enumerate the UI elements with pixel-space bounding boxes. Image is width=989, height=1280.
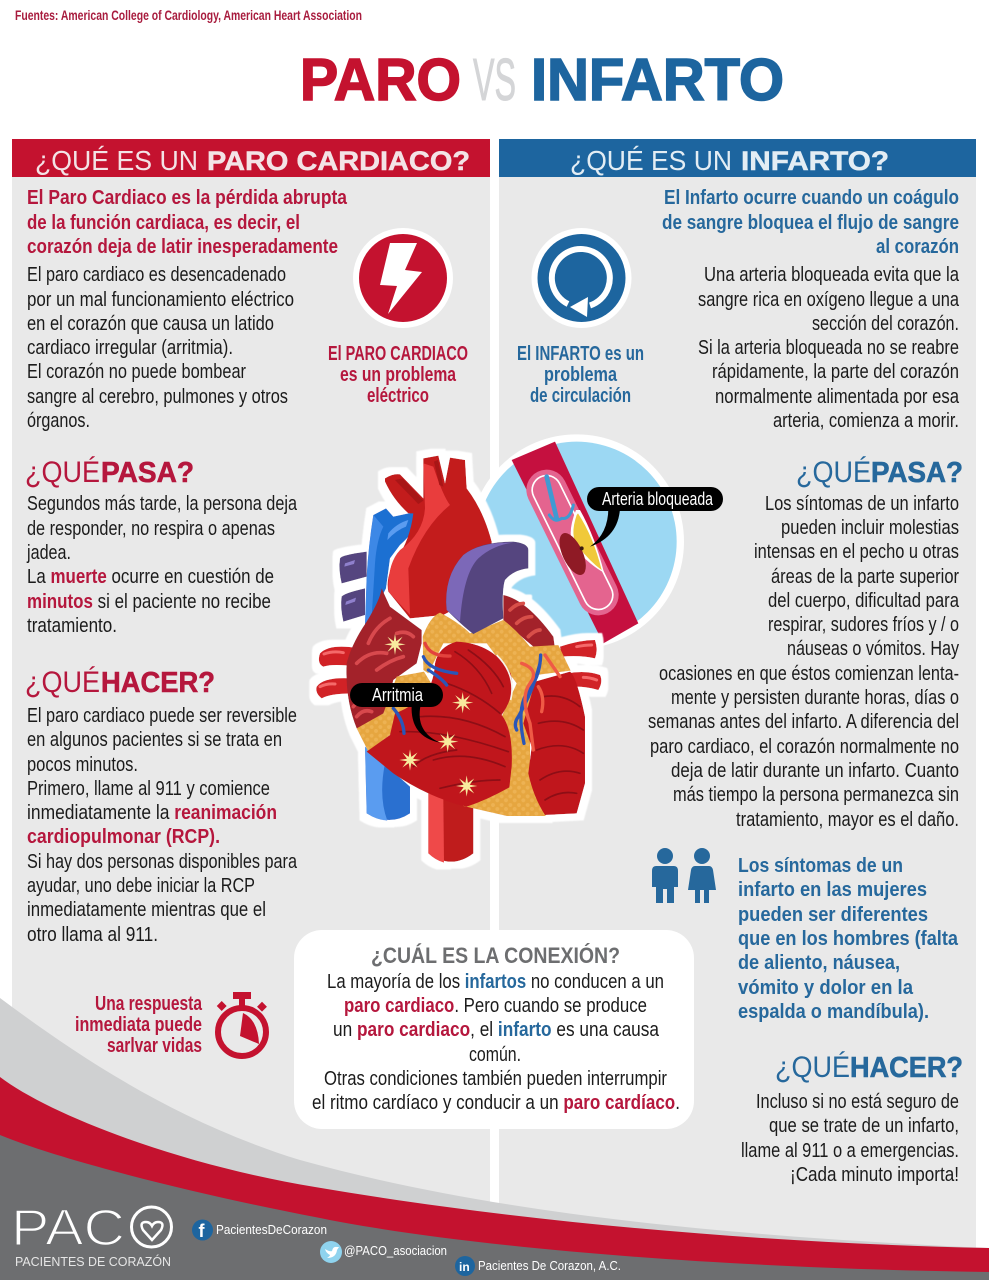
text: sintomas en mujeres: Los síntomas de un — [738, 855, 903, 877]
heading: que pasa (infarto) — [796, 456, 963, 489]
callout: arritmia — [350, 683, 443, 707]
callout: arteria bloqueada: Arteria bloqueada — [602, 489, 714, 509]
intro: paro cardiaco definition: El Paro Cardiaco es la pérdida abrupta — [27, 187, 348, 209]
text: paro cardiaco explanation — [27, 264, 294, 432]
logo: PACO: PAC — [11, 1199, 125, 1256]
text: que hacer (paro): El paro cardiaco puede ser reversible — [27, 705, 297, 727]
text: que pasa (paro): minutos si el paciente no recibe — [27, 591, 271, 613]
header: infarto — [499, 139, 976, 177]
callout panel: cual es la conexion: el ritmo cardíaco y conducir a un paro cardíaco. — [312, 1092, 680, 1114]
social: facebook: PacientesDeCorazon — [216, 1222, 327, 1237]
callout panel: cual es la conexion: paro cardiaco. Pero cuando se produce — [344, 995, 647, 1017]
side vessels — [316, 640, 601, 698]
social: twitter — [320, 1241, 447, 1263]
heading: que hacer (paro): ¿QUÉ — [25, 666, 100, 699]
label: problema de circulacion: de circulación — [530, 385, 631, 407]
text: sintomas en mujeres: que en los hombres (falta — [738, 928, 959, 950]
text: infarto explanation — [698, 264, 960, 432]
artery inset circle — [469, 434, 684, 649]
text: sintomas en mujeres: infarto en las mujeres — [738, 879, 927, 901]
text: sintomas en mujeres: espalda o mandíbula). — [738, 1001, 929, 1023]
text: que hacer (infarto) heading — [775, 1051, 963, 1084]
text: que hacer (paro): inmediatamente mientras que el — [27, 899, 266, 921]
source line: Fuentes: American College of Cardiology, American Heart Association — [15, 7, 362, 23]
callout panel: cual es la conexion — [294, 930, 694, 1129]
label: problema de circulacion — [517, 343, 644, 407]
text: sintomas en mujeres — [738, 855, 959, 1023]
logo: PACO — [11, 1199, 172, 1269]
callout panel: cual es la conexion: un paro cardiaco, el infarto es una causa — [333, 1019, 660, 1041]
coronary vessels — [393, 643, 560, 750]
callout: arteria bloqueada — [587, 487, 723, 511]
text: que hacer (paro): ayudar, uno debe iniciar la RCP — [27, 875, 255, 897]
text: sintomas en mujeres: pueden ser diferentes — [738, 904, 928, 926]
label: problema de circulacion: problema — [544, 364, 618, 386]
heading: que pasa (paro): ¿QUÉ — [25, 456, 100, 489]
text: paro cardiaco explanation: El paro cardiaco es desencadenado — [27, 264, 286, 286]
text: paro cardiaco explanation: cardiaco irregular (arritmia). — [27, 337, 233, 359]
text: paro cardiaco explanation: órganos. — [27, 410, 90, 432]
fat tissue — [357, 613, 571, 816]
text: que pasa (paro) — [26, 493, 298, 637]
text: que hacer (infarto) heading: ¿QUÉ — [775, 1051, 850, 1084]
text: que hacer (infarto) heading: HACER? — [850, 1052, 963, 1084]
label: problema electrico — [328, 343, 468, 407]
intro: paro cardiaco definition — [27, 187, 348, 258]
intro: paro cardiaco definition: corazón deja de latir inesperadamente — [27, 236, 338, 258]
callout: arritmia: Arritmia — [372, 685, 424, 705]
label: problema electrico: El PARO CARDIACO — [328, 343, 468, 365]
text: paro cardiaco explanation: El corazón no puede bombear — [27, 361, 246, 383]
intro: infarto definition — [662, 187, 959, 258]
text: paro cardiaco explanation: por un mal funcionamiento eléctrico — [27, 289, 294, 311]
intro: infarto definition: al corazón — [876, 236, 959, 258]
heart — [316, 456, 601, 863]
title: PARO — [300, 47, 461, 113]
text: respuesta inmediata: sarlvar vidas — [107, 1035, 202, 1057]
label: problema electrico: eléctrico — [367, 385, 429, 407]
header: paro cardiaco: ¿QUÉ ES UN — [35, 145, 198, 176]
title: INFARTO — [531, 47, 784, 113]
text: respuesta inmediata — [75, 993, 203, 1057]
heading: que pasa (paro): PASA? — [101, 457, 194, 489]
social: linkedin: in — [459, 1260, 470, 1274]
text: infarto explanation: sección del corazón. — [812, 313, 959, 335]
social: linkedin: Pacientes De Corazon, A.C. — [478, 1258, 621, 1273]
text: que hacer (paro): Primero, llame al 911 y comience — [27, 778, 270, 800]
icon: man and woman — [652, 848, 716, 903]
text: que hacer (paro): en algunos pacientes si se trata en — [27, 729, 282, 751]
text: que hacer (paro): cardiopulmonar (RCP). — [27, 826, 220, 848]
social: facebook: f — [198, 1221, 206, 1241]
text: que hacer (paro) — [27, 705, 298, 946]
heading: que hacer (paro) — [25, 666, 215, 699]
icon: stopwatch — [217, 992, 267, 1056]
right ventricle — [523, 672, 585, 815]
text: paro cardiaco explanation: sangre al cerebro, pulmones y otros — [27, 386, 288, 408]
callout tails — [412, 508, 620, 743]
purple vessels left — [339, 552, 367, 622]
callout panel: cual es la conexion: común. — [469, 1044, 521, 1066]
left ventricle — [367, 642, 512, 807]
heart and artery illustration — [316, 434, 684, 863]
text: que hacer (infarto): ¡Cada minuto importa! — [790, 1164, 959, 1186]
heading: que pasa (paro) — [25, 456, 194, 489]
text: que pasa (paro): jadea. — [26, 542, 71, 564]
header: paro cardiaco: PARO CARDIACO? — [207, 146, 470, 176]
intro: paro cardiaco definition: de la función cardiaca, es decir, el — [27, 212, 300, 234]
label: problema electrico: es un problema — [340, 364, 457, 386]
text: que pasa (paro): La muerte ocurre en cuestión de — [27, 566, 274, 588]
text: respuesta inmediata: inmediata puede — [75, 1014, 202, 1036]
aorta — [385, 456, 492, 618]
text: sintomas en mujeres: vómito y dolor en la — [738, 977, 914, 999]
heading: que pasa (infarto): PASA? — [871, 457, 963, 489]
callout panel: cual es la conexion: ¿CUÁL ES LA CONEXIÓN? — [371, 943, 620, 968]
text: que pasa (paro): de responder, no respira o apenas — [27, 518, 275, 540]
heading: que pasa (infarto): ¿QUÉ — [796, 456, 871, 489]
icon: lightning bolt — [353, 228, 453, 328]
social: linkedin — [455, 1256, 621, 1276]
text: que hacer (paro): inmediatamente la reanimación — [27, 802, 277, 824]
title: VS — [473, 47, 516, 113]
text: que hacer (paro): otro llama al 911. — [27, 924, 158, 946]
callout panel: cual es la conexion: Otras condiciones también pueden interrumpir — [324, 1068, 667, 1090]
atria — [346, 588, 555, 728]
text: que hacer (infarto) — [741, 1091, 959, 1186]
header: paro cardiaco — [12, 139, 490, 177]
text: paro cardiaco explanation: en el corazón que causa un latido — [27, 313, 274, 335]
text: que hacer (paro): Si hay dos personas disponibles para — [27, 851, 298, 873]
pulmonary artery — [446, 542, 528, 634]
text: que hacer (paro): pocos minutos. — [27, 754, 138, 776]
icon: circulation arrow — [532, 228, 632, 328]
heading: que hacer (paro): HACER? — [101, 667, 215, 699]
header: infarto: INFARTO? — [741, 146, 889, 176]
text: que pasa (infarto) — [648, 493, 960, 831]
arrhythmia sparks — [384, 634, 477, 797]
text: respuesta inmediata: Una respuesta — [95, 993, 203, 1015]
text: que pasa (paro): tratamiento. — [27, 615, 117, 637]
text: sintomas en mujeres: de aliento, náusea, — [738, 952, 900, 974]
label: problema de circulacion: El INFARTO es un — [517, 343, 644, 365]
social: facebook — [192, 1220, 327, 1241]
social: twitter: @PACO_asociacion — [344, 1243, 447, 1258]
descending aorta — [428, 793, 473, 863]
title — [300, 47, 784, 113]
text: que pasa (paro): Segundos más tarde, la persona deja — [27, 493, 298, 515]
callout panel: cual es la conexion: La mayoría de los infartos no conducen a un — [327, 971, 664, 993]
blue veins — [365, 508, 419, 821]
swoosh footer — [0, 998, 989, 1280]
header: infarto: ¿QUÉ ES UN — [570, 145, 732, 176]
logo: PACO: PACIENTES DE CORAZÓN — [15, 1254, 171, 1269]
